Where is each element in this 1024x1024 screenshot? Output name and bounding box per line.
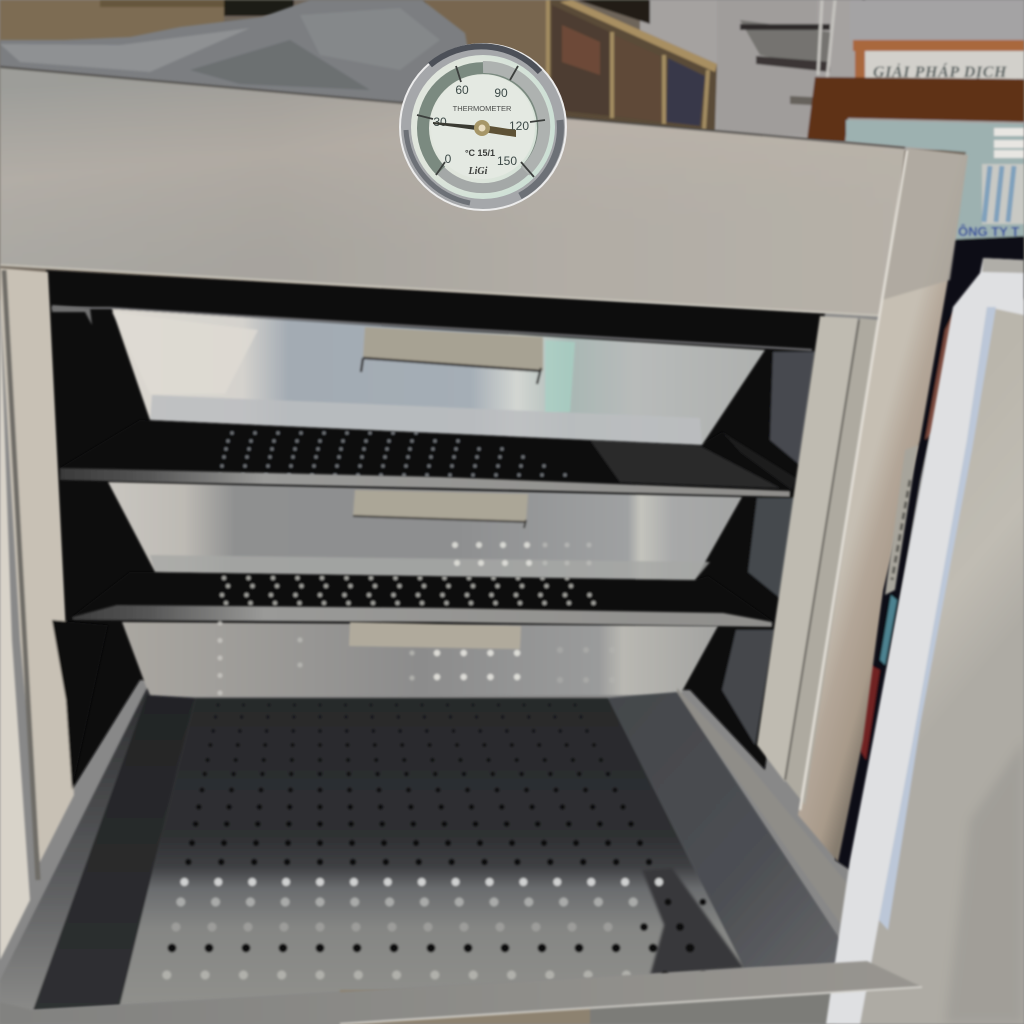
teal notice board [846,120,1024,240]
space under drawer [340,985,860,1024]
dark gap behind door [835,236,1024,870]
second shelf front lip [60,468,790,497]
tray handle [349,622,521,649]
third tray [122,622,718,697]
top tray [52,308,812,445]
top panel with brushed steel [0,67,905,317]
left post [0,268,108,960]
right drawer rim [677,688,922,987]
light spots [455,545,540,563]
left inner wall [33,695,195,1010]
drawer front frame [0,961,922,1024]
bottom drawer [0,688,922,1024]
brand label: LiGi [468,166,488,177]
brown wood frame [807,77,1024,142]
right side column [757,148,968,862]
gauge needle [433,120,516,137]
third perforated shelf [72,572,774,627]
second tray [108,482,742,580]
scale numbers: 150 [497,154,517,168]
rear right wall panels [770,352,815,465]
gauge bezel [400,44,566,210]
tray handle [361,327,543,384]
teal notice board: ÔNG TY T [958,224,1019,239]
upper rail lip [52,308,812,350]
perforated floor [120,698,744,1005]
gauge label: THERMOMETER [453,104,512,113]
tray handle [353,490,528,528]
second perforated shelf [60,420,796,497]
open door on the right [826,258,1024,1024]
door hinge [885,445,918,595]
plastic bag on top [0,0,470,104]
right inner wall [608,692,855,968]
wooden display cabinet [424,0,717,132]
thermometer gauge [400,44,566,210]
spiral staircase [740,0,914,106]
scale numbers: 90 [494,86,508,100]
third shelf front lip [72,605,772,627]
scale numbers [433,83,529,168]
left drawer rim [0,688,150,1024]
scale numbers: 30 [433,115,447,129]
gauge dial [411,55,555,199]
scale ring [423,68,543,171]
scale numbers: 60 [455,83,469,97]
sign with orange border: GIẢI PHÁP DỊCH [873,62,1007,81]
scale numbers: 0 [445,152,452,166]
cabinet interior [46,270,825,790]
sign with orange border [853,40,1024,81]
unit label: °C 15/1 [465,148,495,158]
scale numbers: 120 [509,119,529,133]
